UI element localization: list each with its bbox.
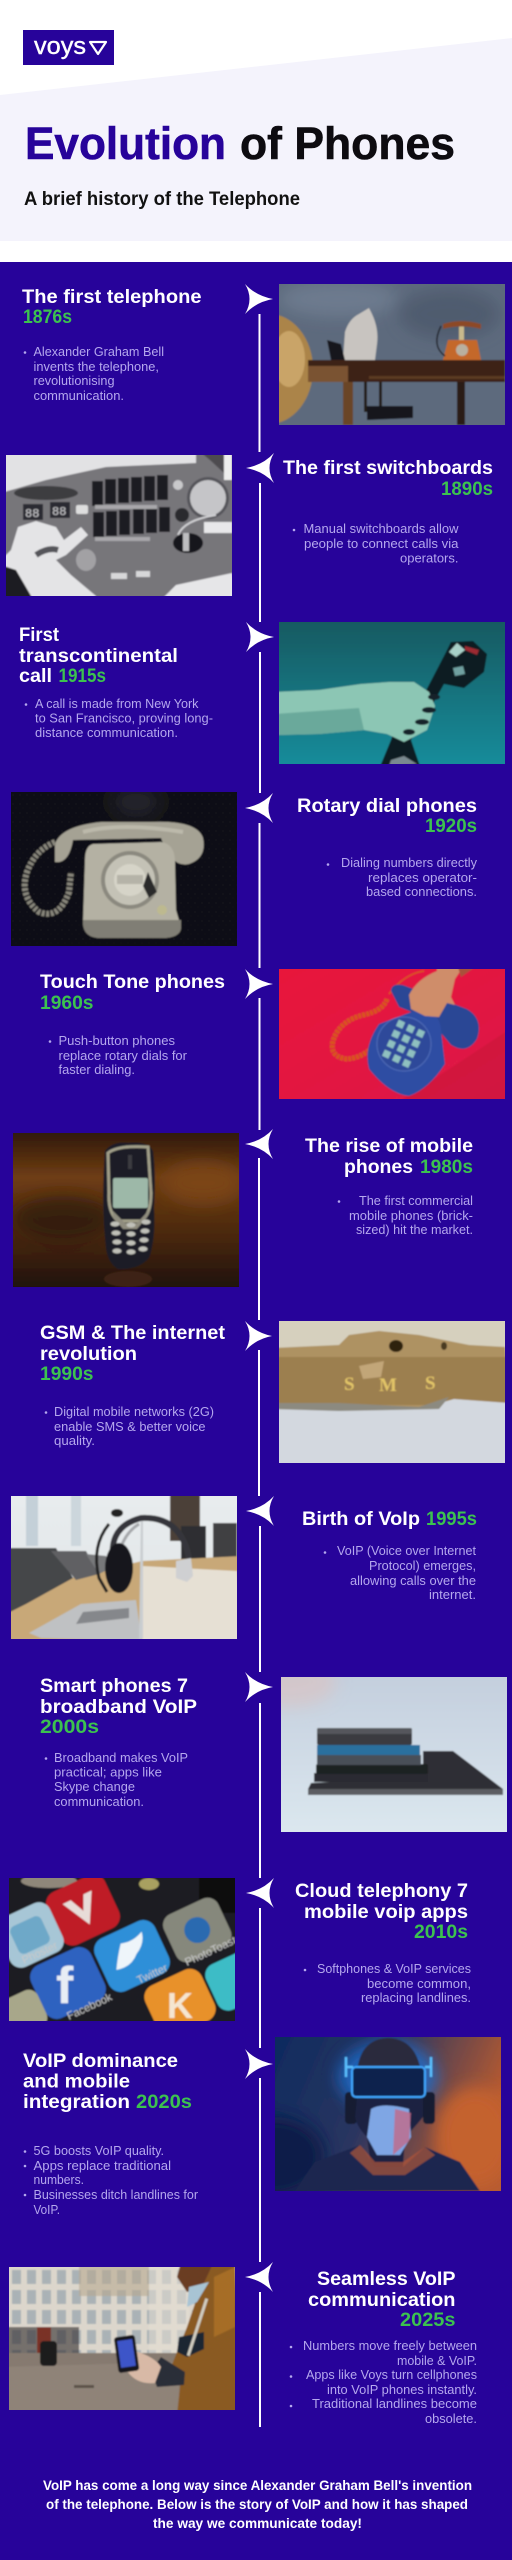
milestone: seamless VoIP communication [4,2262,477,2426]
heading: Seamless VoIP [317,2269,456,2290]
description: to San Francisco, proving long- [35,710,213,726]
heading [297,796,477,837]
heading: Touch Tone phones [40,972,225,993]
heading: Rotary dial phones [297,796,477,817]
photo: smartphone app icons: f [56,1957,74,2015]
logo: voys [23,30,114,65]
description: Broadband makes VoIP [54,1750,188,1765]
closing statement [43,2477,472,2531]
heading [302,1509,477,1530]
description [45,1750,188,1809]
subtitle: A brief history of the Telephone [24,189,300,210]
milestone: birth of VoIP [6,1491,477,1644]
description: Protocol) emerges, [369,1558,476,1573]
description: internet. [429,1587,476,1602]
heading: The rise of mobile [305,1136,473,1157]
description: Businesses ditch landlines for [34,2187,199,2202]
heading: 1995s [426,1509,477,1530]
heading: 1960s [40,993,94,1014]
photo: smartphone app icons: Twitter [135,1962,170,1987]
description [24,2143,199,2217]
photo: antique telephone on a table [279,284,505,425]
description [304,1961,471,2005]
heading [40,972,225,1014]
photo: black and white control panel: 88 [52,505,66,519]
description [327,855,477,899]
description: into VoIP phones instantly. [327,2382,477,2397]
description: enable SMS & better voice [54,1419,206,1434]
milestone: first transcontinental call [19,617,510,769]
arrow [245,1129,273,1159]
description: Dialing numbers directly [341,855,477,870]
description: Skype change [54,1779,135,1794]
description [338,1193,473,1237]
photo: SMS letters on a wall: S [425,1373,436,1394]
arrow [245,2262,273,2292]
heading: The first switchboards [283,458,493,479]
heading: 1915s [58,666,106,687]
description: people to connect calls via [304,536,459,551]
heading: GSM & The internet [40,1323,226,1344]
description: allowing calls over the [350,1573,476,1588]
photo: person holding a phone on a city square [9,2267,235,2410]
heading: integration [23,2092,130,2113]
description: Softphones & VoIP services [317,1961,471,1976]
arrow [245,1321,272,1351]
arrow [245,1672,273,1702]
description: faster dialing. [58,1062,135,1077]
photo: neon VR skull figure [275,2037,501,2191]
description: based connections. [366,884,477,899]
photo: SMS letters on a wall: S [344,1374,355,1395]
heading: Smart phones 7 [40,1676,188,1697]
heading: 2025s [400,2310,456,2331]
description: Push-button phones [58,1033,175,1048]
description [324,1543,476,1602]
photo: black and white control panel [6,455,232,596]
description: mobile & VoIP. [397,2353,477,2368]
description: practical; apps like [54,1764,162,1780]
description: A call is made from New York [35,696,199,711]
milestone: smart phones and broadband VoIP [40,1657,512,1837]
description: Alexander Graham Bell [34,344,164,359]
arrow [246,622,274,652]
heading: 2020s [136,2092,192,2113]
description: replacing landlines. [361,1990,471,2005]
heading: VoIP dominance [23,2051,178,2072]
description: replace rotary dials for [58,1048,188,1063]
heading: and mobile [23,2072,130,2092]
description: 5G boosts VoIP quality. [34,2143,164,2158]
heading: Birth of VoIp [302,1509,420,1530]
heading [308,2269,456,2331]
description [25,696,213,740]
heading [305,1136,473,1178]
description: invents the telephone, [34,359,159,374]
header panel [0,38,512,241]
heading [19,625,178,687]
description [293,521,459,566]
heading: call [19,666,52,687]
description: VoIP. [34,2202,60,2217]
description: Apps replace traditional [34,2158,171,2173]
arrow [245,969,273,999]
description: Numbers move freely between [303,2338,477,2353]
heading: communication [308,2290,456,2311]
heading [295,1881,468,1943]
heading [283,458,493,500]
heading: 1990s [40,1364,94,1385]
closing statement: the way we communicate today! [153,2515,362,2531]
milestone: cloud telephony and mobile VoIP apps [0,1870,471,2044]
heading: 1890s [441,479,493,500]
photo: arm holding a handset [279,622,505,764]
milestone: GSM and the internet revolution [40,1316,510,1468]
milestone: rotary dial phones [6,784,477,951]
heading: 1876s [23,307,72,328]
milestone: first switchboards [1,450,493,601]
heading: 2010s [414,1922,468,1943]
description: communication. [54,1794,144,1809]
closing statement: of the telephone. Below is the story of VoIP and how it has shaped [46,2496,468,2512]
photo: blue push-button telephone on red [279,969,505,1099]
heading: 2000s [40,1717,99,1738]
heading: The first telephone [22,287,202,308]
photo: black and white control panel: 88 [25,507,39,521]
photo: smartphone app icons: Facebook [65,1991,115,2023]
milestone: first telephone [22,279,510,430]
heading [40,1676,197,1738]
description [24,344,164,403]
description: Traditional landlines become [312,2396,477,2411]
arrow [245,2049,273,2079]
description: become common, [367,1976,471,1991]
description: quality. [54,1433,95,1448]
heading: revolution [40,1344,137,1365]
heading: 1920s [425,816,477,837]
photo: stack of phones [281,1677,507,1832]
description: Apps like Voys turn cellphones [306,2367,477,2382]
description [49,1033,188,1077]
heading: First [19,625,60,646]
heading: phones [344,1157,413,1178]
timeline line [258,314,261,2427]
arrow [246,1878,274,1908]
description: operators. [400,550,458,566]
description: mobile phones (brick- [349,1208,473,1223]
photo: SMS letters on a wall: M [379,1375,397,1396]
arrow [245,793,273,823]
title: Evolution [25,118,226,169]
photo: smartphone app icons [9,1878,247,2026]
title [25,118,455,169]
heading: mobile voip apps [304,1902,468,1923]
heading [40,1323,226,1385]
description: communication. [34,388,124,403]
description: VoIP (Voice over Internet [337,1543,476,1558]
photo: smartphone app icons: PhotoToaster [183,1930,247,1969]
photo: rotary telephone [11,792,237,946]
description: The first commercial [359,1193,473,1208]
heading [22,287,202,328]
photo: smartphone app icons: K [167,1985,193,2026]
photo: headset on a laptop [11,1496,237,1639]
description [290,2338,477,2426]
description: distance communication. [35,725,178,740]
milestone: touch tone phones [40,964,510,1104]
description: sized) hit the market. [356,1222,473,1237]
description: obsolete. [425,2411,477,2426]
heading: transcontinental [19,646,178,667]
description: replaces operator- [368,870,477,885]
arrow [246,1496,274,1526]
arrow [245,284,273,314]
title: of Phones [240,118,455,169]
heading: broadband VoIP [40,1697,197,1718]
milestone: VoIP dominance and mobile integration [23,2032,512,2217]
heading: Cloud telephony 7 [295,1881,468,1902]
logo: voys: voys [34,33,86,60]
description: numbers. [34,2172,84,2187]
photo: smartphone app icons: Phoster [20,1940,60,1967]
photo: Nokia mobile phone on wood [13,1133,239,1287]
heading: 1980s [420,1157,473,1178]
closing statement: VoIP has come a long way since Alexander Graham Bell's invention [43,2477,472,2493]
photo: SMS letters on a wall [279,1321,505,1463]
heading [23,2051,192,2113]
description: Digital mobile networks (2G) [54,1404,214,1419]
description: revolutionising [34,373,114,388]
arrow [246,453,274,483]
description [45,1404,214,1448]
milestone: rise of mobile phones [8,1128,473,1292]
description: Manual switchboards allow [304,521,459,536]
